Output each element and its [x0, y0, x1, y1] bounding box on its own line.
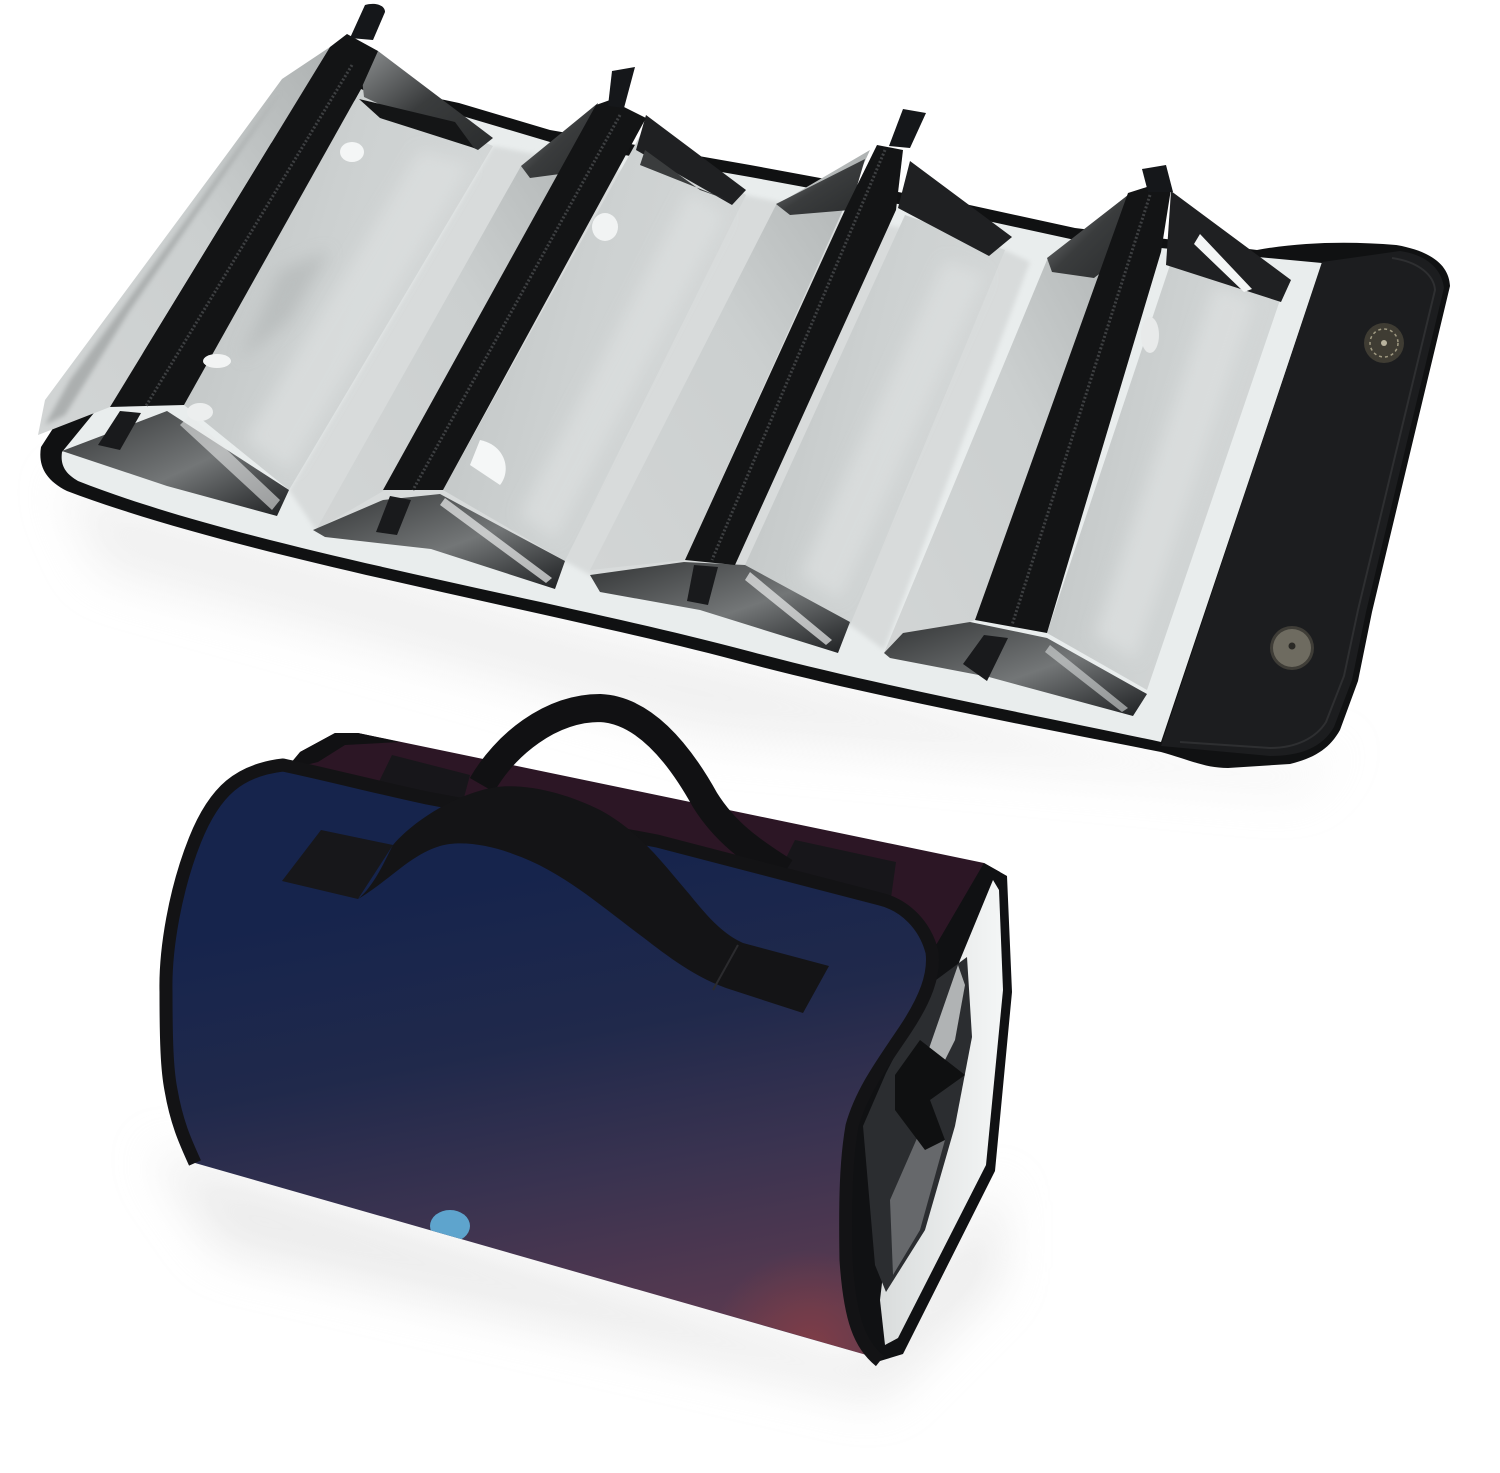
black end flap — [1161, 251, 1444, 756]
black trim of the mat — [40, 80, 1450, 768]
closed rolled bag — [166, 708, 1012, 1361]
background shadows — [60, 480, 1350, 1400]
rear strap left — [375, 755, 470, 805]
pouch 4 — [884, 165, 1291, 716]
rear strap right — [775, 840, 896, 905]
red horizon glow — [738, 1269, 864, 1354]
rear handle — [482, 708, 785, 872]
front handle strap — [282, 786, 829, 1013]
rear maroon panel — [290, 733, 1000, 960]
rear trim — [285, 733, 400, 770]
pouch 3 — [590, 109, 1012, 653]
pouch 2 — [313, 67, 746, 589]
snap button lower — [1270, 626, 1314, 670]
pouch underlay between pockets — [289, 146, 1030, 650]
end panel with clear pouches — [846, 863, 1012, 1361]
light mat lining — [62, 100, 1322, 742]
open organizer with clear zip pouches — [38, 4, 1450, 768]
black front binding — [166, 765, 933, 1361]
moon — [430, 1210, 470, 1242]
front navy panel — [166, 765, 933, 1361]
snap button upper — [1364, 323, 1404, 363]
pouch 1 — [38, 4, 493, 516]
